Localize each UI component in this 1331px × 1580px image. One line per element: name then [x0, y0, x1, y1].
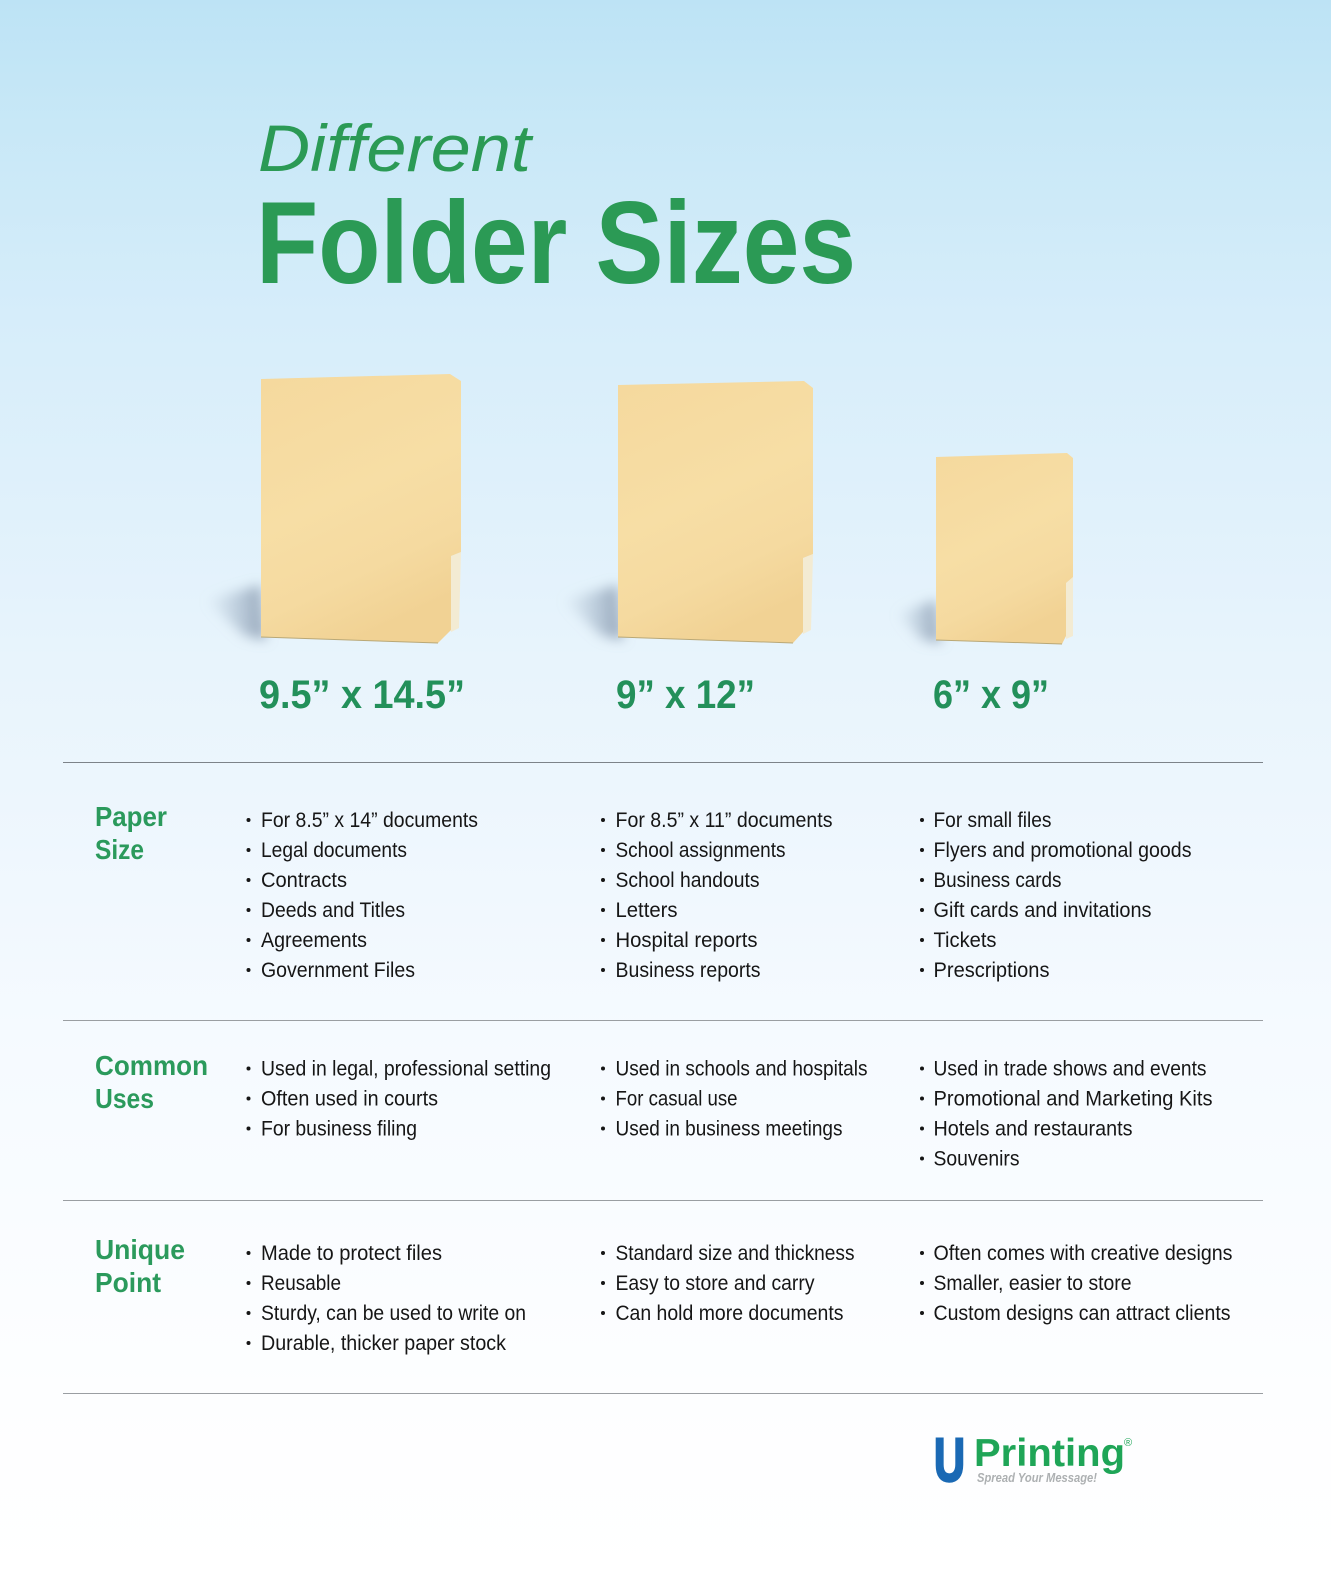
list: paper size, 9.5 x 14.5: Legal documents [261, 839, 407, 862]
row heading: Common Uses [95, 1050, 208, 1114]
folder illustration: 9 x 12 [562, 381, 813, 643]
list: common uses, 6 x 9: Promotional and Marketing Kits [934, 1088, 1212, 1110]
row heading: Unique Point [95, 1234, 185, 1298]
row heading: Common Uses: Common [95, 1050, 208, 1081]
list: paper size, 9.5 x 14.5: Agreements [261, 929, 367, 952]
list: common uses, 6 x 9: Souvenirs [934, 1148, 1020, 1170]
list: unique point, 9.5 x 14.5: Durable, thicker paper stock [261, 1332, 506, 1355]
row heading: Paper Size: Paper [95, 801, 167, 832]
size label: 9.5 x 14.5: 9.5” x 14.5” [259, 673, 465, 717]
row heading: Common Uses: Uses [95, 1083, 154, 1114]
list: common uses, 9.5 x 14.5: Often used in courts [261, 1088, 438, 1110]
list: paper size, 9.5 x 14.5 [246, 809, 478, 982]
list: paper size, 9.5 x 14.5: Deeds and Titles [261, 899, 405, 922]
list: paper size, 6 x 9: Business cards [934, 869, 1062, 892]
list: unique point, 9.5 x 14.5 [246, 1242, 526, 1355]
list: common uses, 9.5 x 14.5: Used in legal, professional setting [261, 1058, 551, 1080]
row heading: Unique Point: Unique [95, 1234, 185, 1265]
list: paper size, 6 x 9: Flyers and promotional goods [934, 839, 1192, 862]
logo: UPrinting [934, 1426, 1132, 1494]
list: paper size, 9 x 12: For 8.5” x 11” documents [616, 809, 832, 832]
list: unique point, 9 x 12 [601, 1242, 854, 1325]
list: common uses, 9 x 12: For casual use [616, 1088, 738, 1110]
list: unique point, 6 x 9: Often comes with creative designs [934, 1242, 1232, 1265]
list: common uses, 6 x 9: Hotels and restaurants [934, 1118, 1132, 1140]
title [256, 111, 856, 308]
size label: 6 x 9: 6” x 9” [933, 673, 1049, 717]
list: common uses, 9.5 x 14.5 [246, 1058, 551, 1140]
list: paper size, 6 x 9: Prescriptions [934, 959, 1050, 982]
list: paper size, 9 x 12: School handouts [616, 869, 760, 892]
list: common uses, 9.5 x 14.5: For business filing [261, 1118, 417, 1140]
list: common uses, 6 x 9: Used in trade shows and events [934, 1058, 1206, 1080]
row heading: Paper Size [95, 801, 167, 865]
list: paper size, 6 x 9 [920, 809, 1192, 982]
list: common uses, 9 x 12: Used in schools and hospitals [616, 1058, 868, 1080]
list: paper size, 9 x 12 [601, 809, 832, 982]
title line: Folder Sizes: Folder Sizes [256, 177, 856, 308]
list: paper size, 9.5 x 14.5: Government Files [261, 959, 415, 982]
list: paper size, 6 x 9: Gift cards and invitations [934, 899, 1152, 922]
list: unique point, 6 x 9: Smaller, easier to store [934, 1272, 1132, 1295]
row heading: Paper Size: Size [95, 834, 144, 865]
list: paper size, 9 x 12: Letters [616, 899, 678, 922]
list: paper size, 6 x 9: Tickets [934, 929, 996, 952]
logo: UPrinting: ® [1124, 1437, 1132, 1449]
list: unique point, 9 x 12: Standard size and thickness [616, 1242, 854, 1265]
list: unique point, 9.5 x 14.5: Sturdy, can be used to write on [261, 1302, 526, 1325]
list: unique point, 9.5 x 14.5: Made to protect files [261, 1242, 442, 1265]
folder illustration: 6 x 9 [896, 453, 1073, 644]
list: paper size, 9 x 12: Business reports [616, 959, 760, 982]
size label: 9 x 12: 9” x 12” [616, 673, 755, 717]
list: paper size, 9.5 x 14.5: For 8.5” x 14” documents [261, 809, 478, 832]
list: common uses, 6 x 9 [920, 1058, 1212, 1170]
list: unique point, 6 x 9 [920, 1242, 1232, 1325]
list: common uses, 9 x 12: Used in business meetings [616, 1118, 842, 1140]
list: unique point, 9.5 x 14.5: Reusable [261, 1272, 341, 1295]
row heading: Unique Point: Point [95, 1267, 161, 1298]
list: paper size, 9 x 12: Hospital reports [616, 929, 758, 952]
list: unique point, 6 x 9: Custom designs can attract clients [934, 1302, 1230, 1325]
logo: UPrinting: Printing [974, 1432, 1125, 1475]
list: paper size, 6 x 9: For small files [934, 809, 1052, 832]
list: common uses, 9 x 12 [601, 1058, 868, 1140]
logo: UPrinting: Spread Your Message! [977, 1470, 1098, 1485]
list: unique point, 9 x 12: Easy to store and carry [616, 1272, 815, 1295]
list: paper size, 9.5 x 14.5: Contracts [261, 869, 347, 892]
list: paper size, 9 x 12: School assignments [616, 839, 786, 862]
folder illustration: 9.5 x 14.5 [205, 374, 461, 643]
logo: UPrinting: U [934, 1426, 965, 1494]
list: unique point, 9 x 12: Can hold more documents [616, 1302, 844, 1325]
title line: Different: Different [258, 111, 534, 185]
